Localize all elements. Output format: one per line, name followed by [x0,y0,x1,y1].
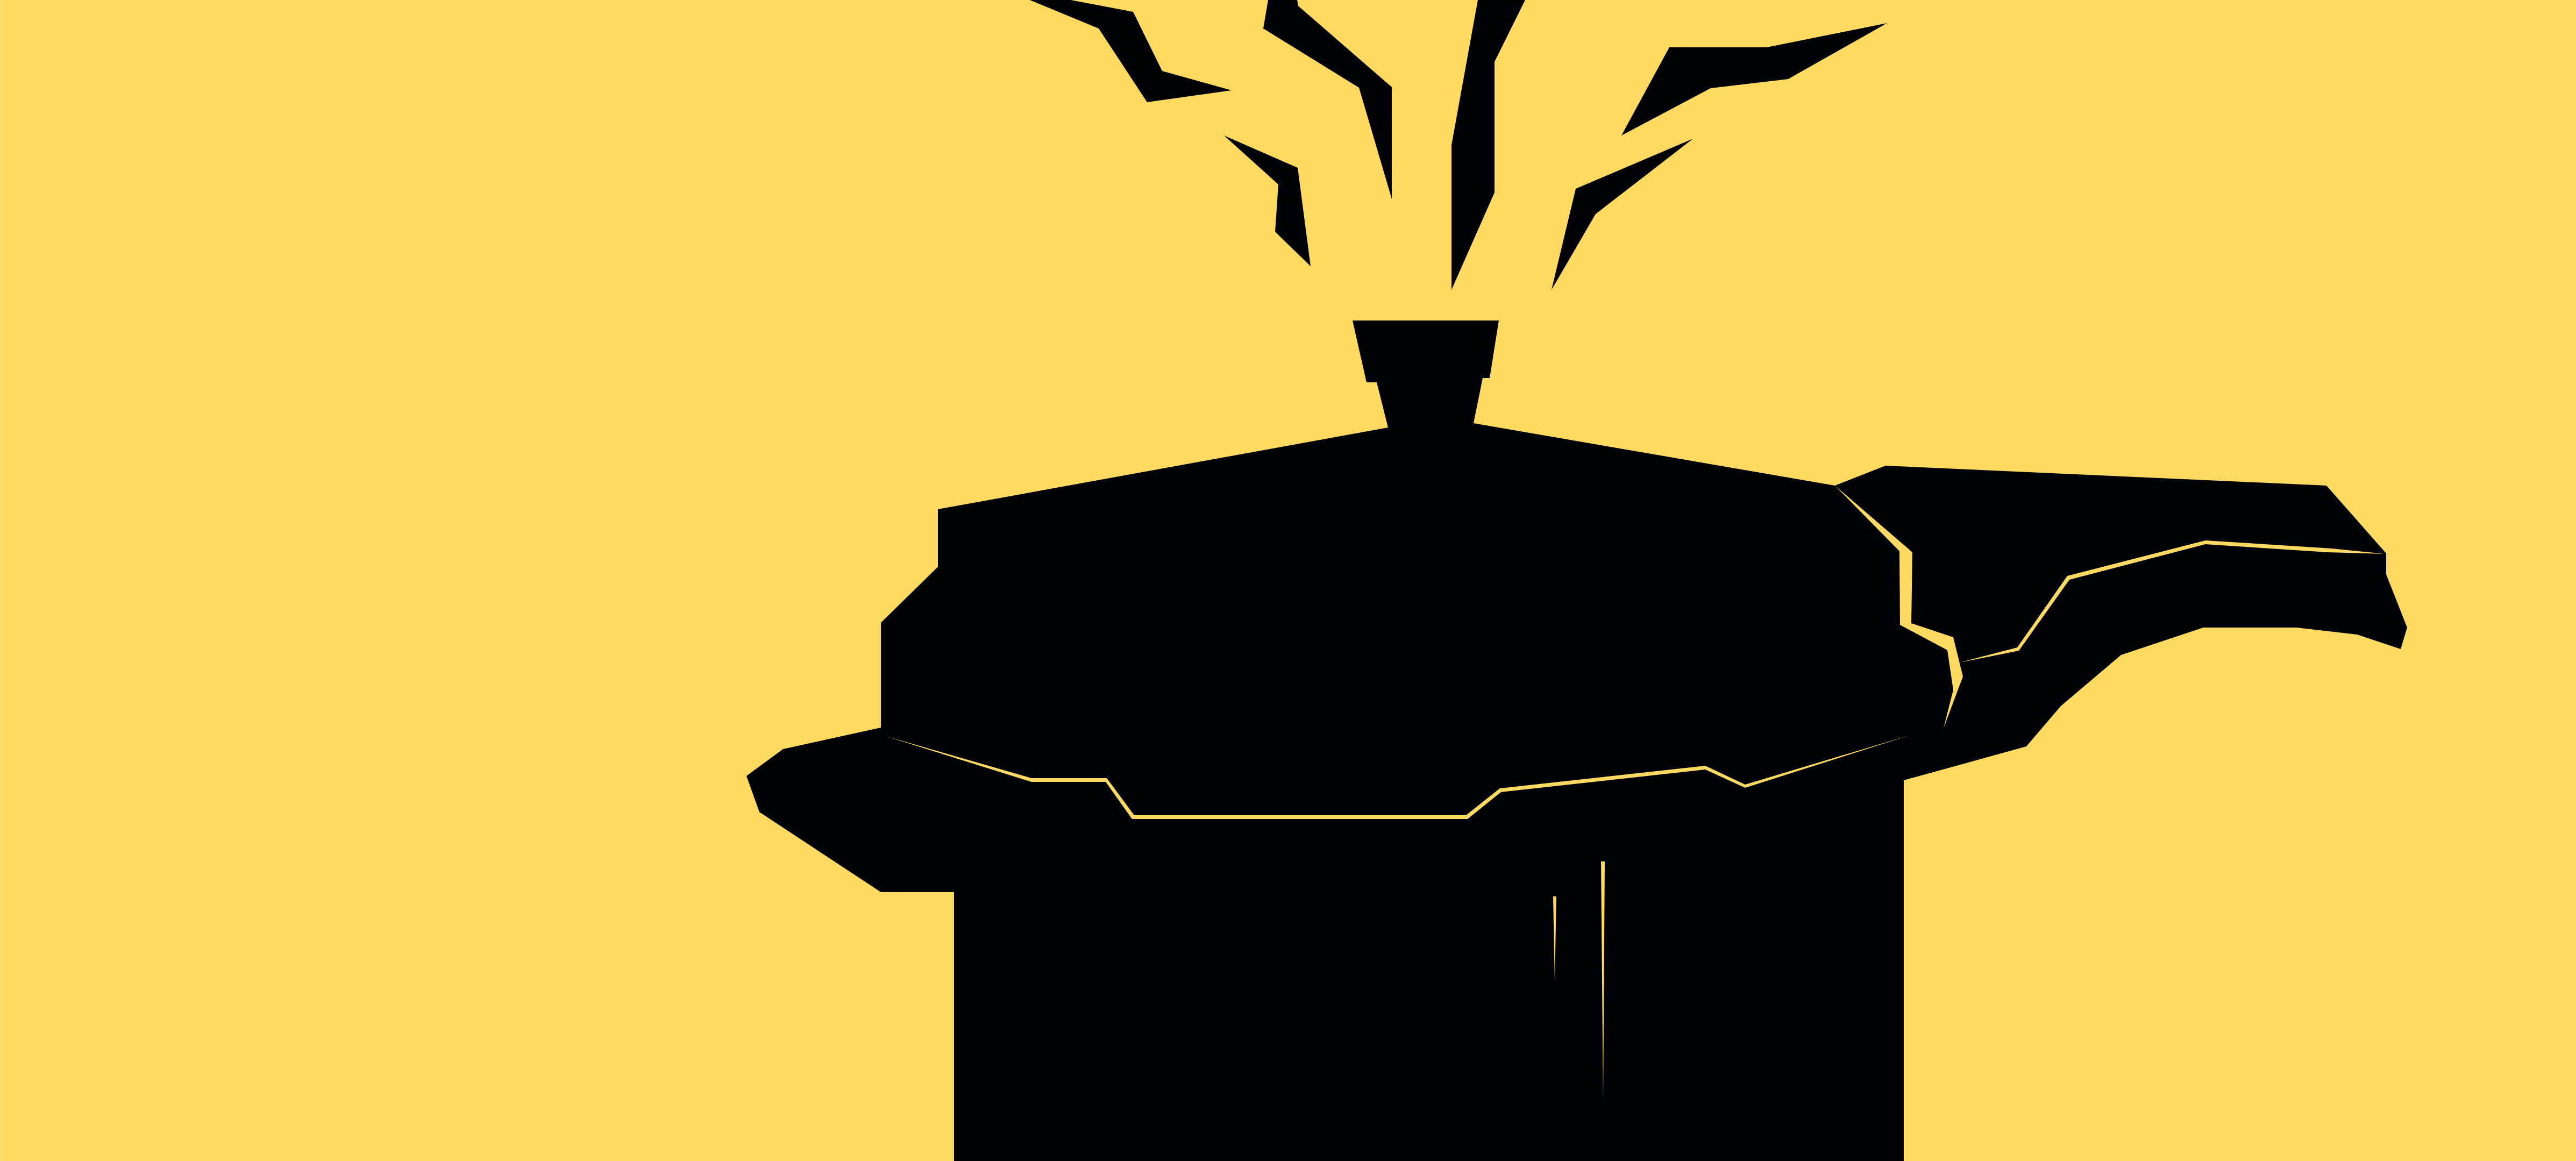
pressure cooker silhouette: valve, lid, handle and pot body [746,320,2407,1161]
highlight: handle seam [1960,540,2385,663]
steam shard: centre [1451,0,1525,290]
steam shard: upper right [1621,23,1887,136]
highlight: short body glint [1553,896,1556,981]
highlight: gap between lid and handle [1835,486,1963,728]
steam shard: far upper left [1030,0,1232,102]
steam shard: lower right [1552,139,1693,290]
steam shard: small left [1224,136,1311,266]
highlight: long body glint [1601,861,1605,1100]
steam shard: upper left [1263,0,1392,199]
steam shards [1030,0,1887,290]
highlight: lid rim line [886,735,1910,819]
